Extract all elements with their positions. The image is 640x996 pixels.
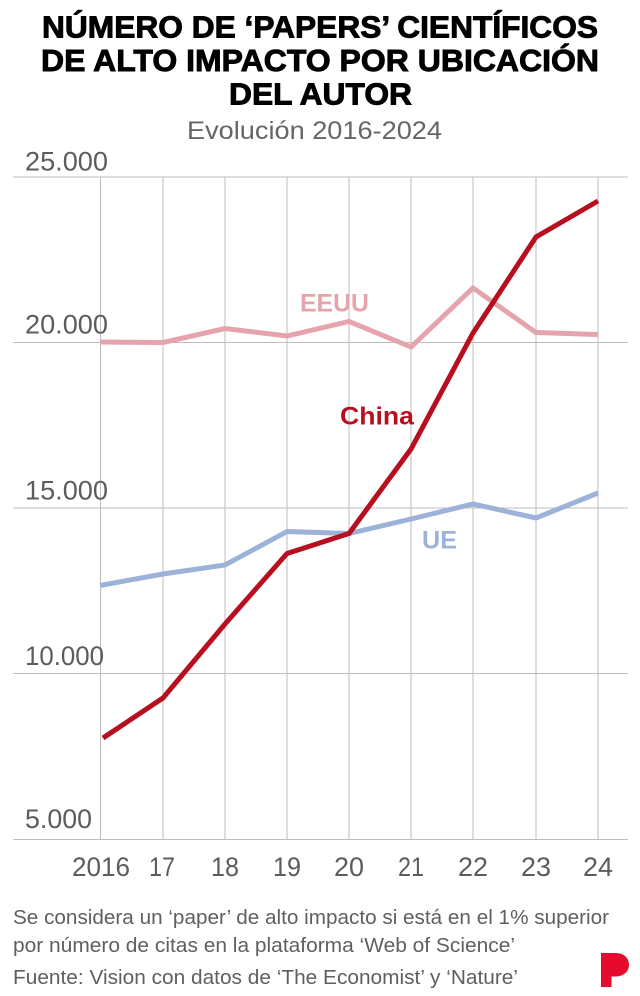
- title: DEL AUTOR: [229, 76, 412, 112]
- title: DE ALTO IMPACTO POR UBICACIÓN: [41, 42, 599, 78]
- title: NÚMERO DE ‘PAPERS’ CIENTÍFICOS: [42, 8, 598, 44]
- y axis labels: 5.000: [25, 804, 92, 834]
- footnote: Fuente: Vision con datos de ‘The Economist’ y ‘Nature’: [13, 967, 518, 989]
- x axis labels: 19: [273, 852, 301, 882]
- x axis labels: 18: [211, 852, 239, 882]
- footnote: Se considera un ‘paper’ de alto impacto si está en el 1% superior: [13, 907, 609, 929]
- x axis labels: 20: [334, 852, 364, 882]
- label: EEUU: EEUU: [300, 290, 369, 318]
- x axis labels: 2016: [72, 852, 130, 882]
- line: EEUU: [100, 288, 598, 347]
- x axis labels: 21: [398, 852, 424, 882]
- y axis labels: 20.000: [25, 310, 108, 340]
- footnote: por número de citas en la plataforma ‘Web of Science’: [13, 935, 515, 957]
- x axis labels: 23: [521, 852, 551, 882]
- icon: P logo: [601, 953, 629, 987]
- x axis labels: 24: [583, 852, 613, 882]
- label: China: China: [340, 402, 415, 430]
- y axis labels: 25.000: [25, 146, 108, 176]
- x axis labels: 22: [458, 852, 488, 882]
- x axis labels: 17: [149, 852, 175, 882]
- label: UE: UE: [422, 526, 457, 554]
- line: UE: [100, 493, 598, 586]
- subtitle: Evolución 2016-2024: [187, 117, 442, 145]
- y axis labels: 10.000: [25, 641, 104, 671]
- y axis labels: 15.000: [25, 476, 108, 506]
- title: [41, 8, 599, 112]
- y axis labels: [25, 146, 108, 834]
- line: China: [103, 201, 598, 738]
- x axis labels: [72, 852, 613, 882]
- footnote: [13, 907, 609, 989]
